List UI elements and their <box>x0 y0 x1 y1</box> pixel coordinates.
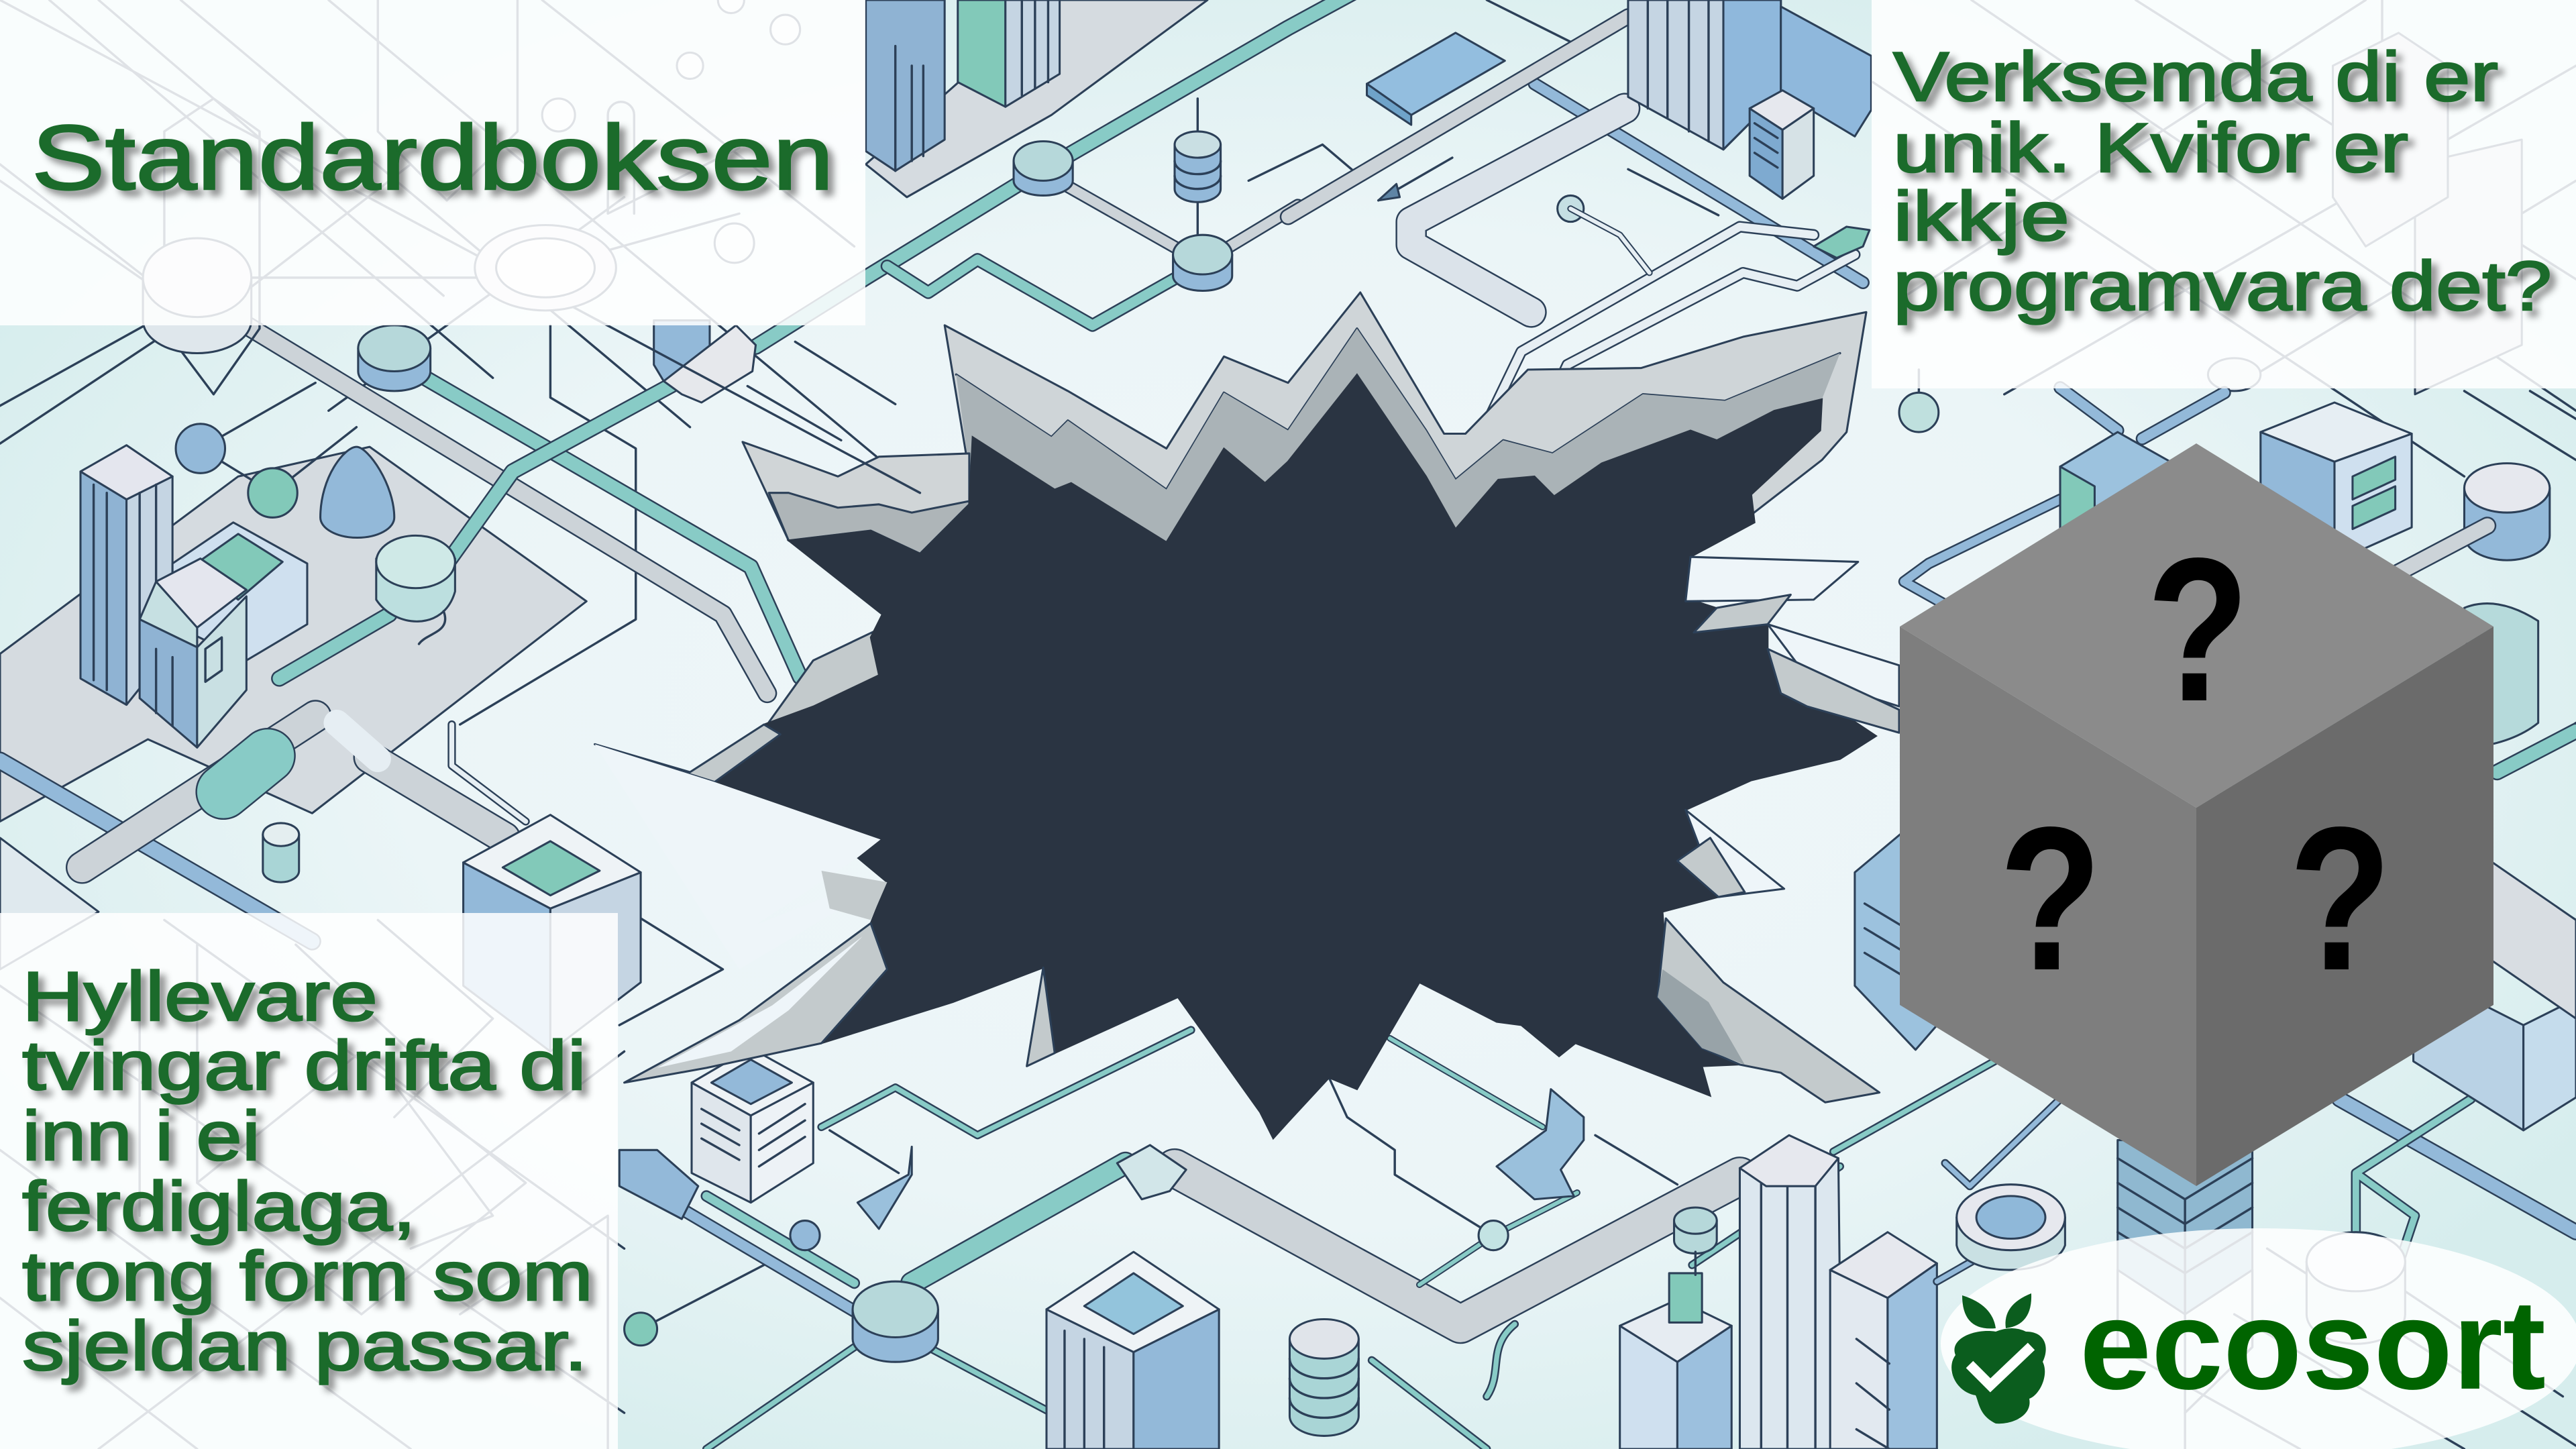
node: blue cylinder left <box>358 325 431 391</box>
icon: mystery cube: ? <box>2289 784 2392 1013</box>
hidden building below cube <box>2118 1140 2300 1449</box>
network lower right <box>2235 723 2576 1449</box>
hidden plates lower left under panel <box>0 920 625 1449</box>
text block: question: programvara det? <box>1893 248 2552 325</box>
db cylinder and nodes top <box>1014 131 1232 290</box>
text block: statement: inn i ei <box>22 1097 260 1175</box>
main junction node <box>853 1281 938 1362</box>
broken tank <box>376 535 455 644</box>
torn flakes around the hole <box>595 557 1899 1102</box>
plates <box>0 0 1208 969</box>
text block: statement: Hyllevare <box>22 958 378 1036</box>
small cylinder <box>263 823 299 882</box>
panel: question <box>1872 0 2576 388</box>
text block: statement <box>22 958 593 1385</box>
square tower bottom <box>1046 1252 1219 1449</box>
pipe sleeve <box>654 321 756 402</box>
title: Standardboksen <box>32 107 834 209</box>
network lines upper left <box>0 0 1364 724</box>
top pipes and block centre-right <box>1248 0 1870 453</box>
torn rim: grey layers around the hole <box>743 292 1866 724</box>
text block: question: ikkje <box>1893 178 2070 256</box>
icon: apple with check <box>1951 1293 2046 1424</box>
pipes lower left <box>0 716 723 1025</box>
pipes bottom centre <box>619 1030 1739 1449</box>
square tower with teal top <box>464 815 641 1051</box>
blue building left of cube <box>1855 821 1972 1050</box>
tower buildings upper left <box>80 445 307 747</box>
servers right of cube top <box>2060 402 2550 747</box>
tall tower and small tank <box>1620 1061 1994 1449</box>
icon: mystery cube: ? <box>1999 784 2102 1013</box>
circle nodes and cone <box>176 424 394 537</box>
text block: question: unik. Kvifor er <box>1893 109 2408 187</box>
text block: question: Verksemda di er <box>1893 38 2498 116</box>
text block: statement: trong form som <box>22 1238 593 1316</box>
text block: question <box>1893 38 2552 325</box>
text block: statement: ferdiglaga, <box>22 1168 416 1246</box>
dark hole <box>714 374 1876 1138</box>
wordmark: ecosort <box>2080 1274 2546 1416</box>
database stack <box>1289 1320 1515 1449</box>
ladder building <box>1830 1099 2060 1449</box>
buildings top right <box>1628 0 1871 199</box>
crack lines and blue zigzag <box>1329 1038 1677 1285</box>
panel: statement <box>0 913 618 1449</box>
logo: ecosort <box>1951 1274 2546 1424</box>
text block: statement: sjeldan passar. <box>22 1307 588 1385</box>
icon: mystery cube: ? <box>2147 515 2249 744</box>
server bottom <box>692 1048 813 1203</box>
ghost network behind right panel <box>1873 0 2576 476</box>
panel: title <box>0 0 865 325</box>
text block: statement: tvingar drifta di <box>22 1027 586 1105</box>
blue pipes right top <box>1904 388 2576 604</box>
towers top centre <box>866 0 1060 171</box>
ghost network behind title panel <box>0 0 920 493</box>
ring node <box>1957 1185 2065 1270</box>
logo backdrop <box>1941 1228 2576 1449</box>
icon: mystery cube <box>1900 443 2493 1186</box>
